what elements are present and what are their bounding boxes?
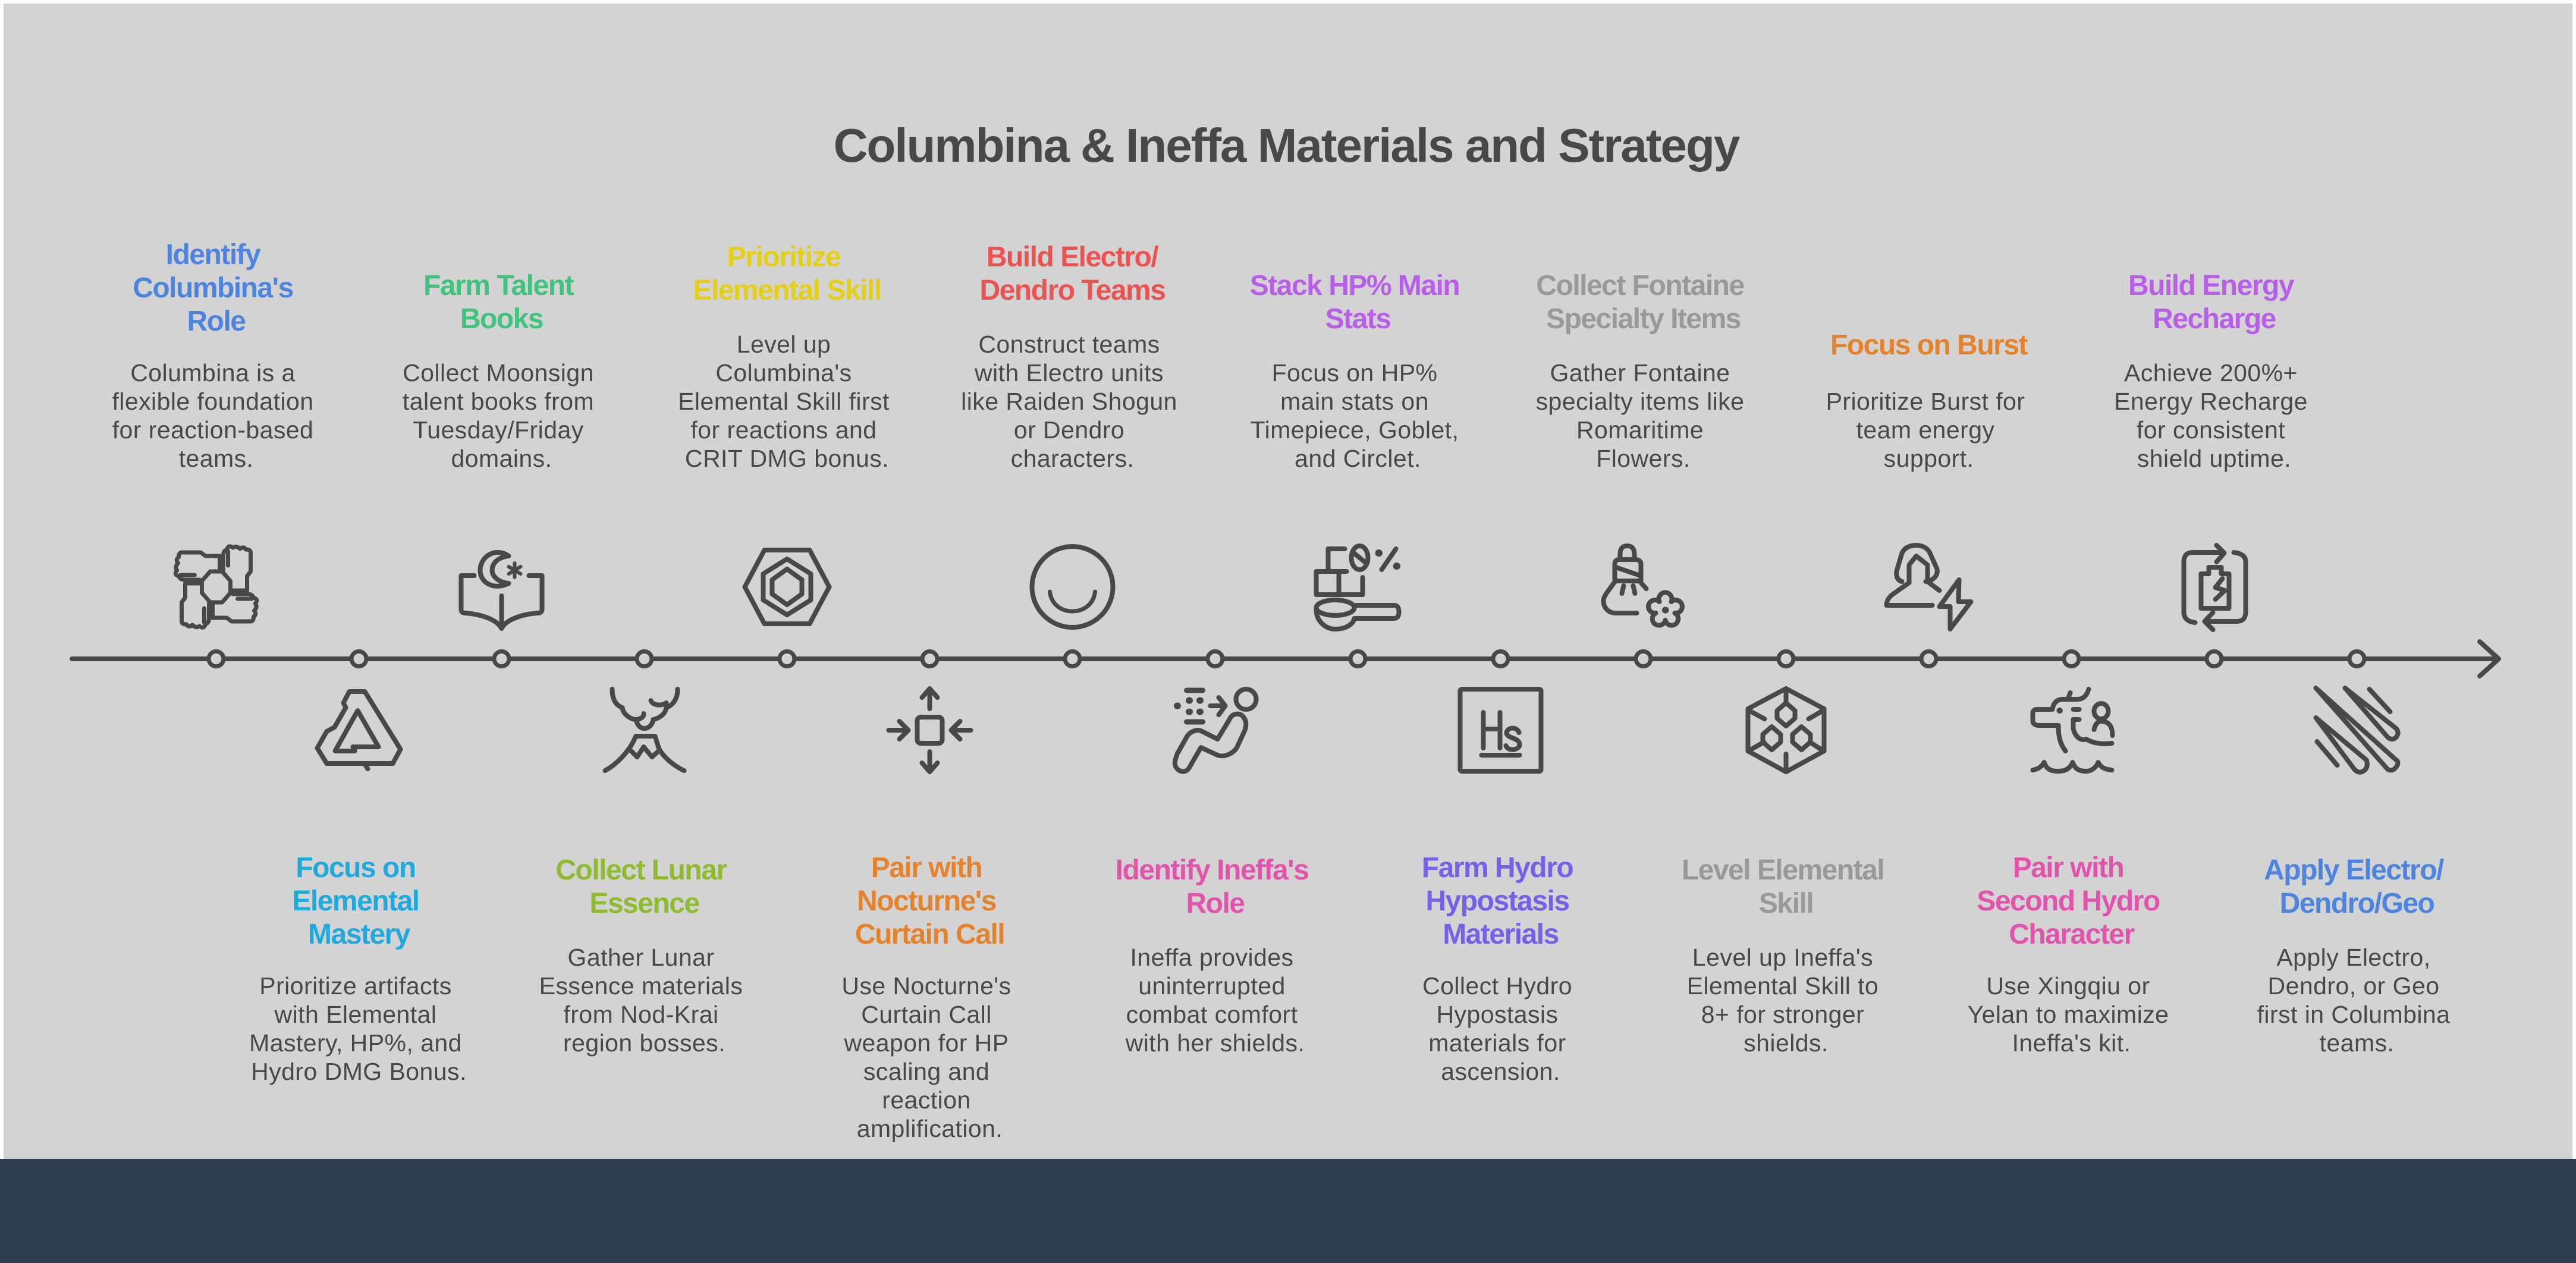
- heading: Nocturne's: [857, 885, 996, 917]
- description: or Dendro: [1014, 416, 1124, 444]
- heading: Character: [2009, 919, 2135, 950]
- heading: Focus on: [296, 852, 416, 884]
- description: shield uptime.: [2137, 445, 2291, 472]
- heading: Second Hydro: [1977, 885, 2160, 917]
- description: Focus on HP%: [1272, 359, 1437, 387]
- heading: Farm Hydro: [1422, 852, 1573, 884]
- heading: Identify: [166, 239, 261, 271]
- step: Farm Talent Books: [403, 270, 594, 629]
- step: Build Energy Recharge: [2114, 270, 2308, 630]
- description: shields.: [1743, 1029, 1829, 1057]
- step: Apply Electro/Dendro/Geo: [2257, 688, 2450, 1057]
- description: weapon for HP: [843, 1029, 1009, 1057]
- description: region bosses.: [563, 1029, 725, 1057]
- step: Collect Fontaine Specialty Items: [1536, 270, 1744, 626]
- icon: battery with cycle arrows: [2184, 545, 2245, 630]
- icon: moon and book: [461, 552, 542, 629]
- heading: Materials: [1443, 919, 1559, 950]
- icon: triangle: [318, 692, 401, 769]
- heading: Skill: [1759, 888, 1813, 919]
- description: talent books from: [403, 388, 594, 415]
- title: Columbina & Ineffa Materials and Strategy: [834, 119, 1741, 172]
- description: characters.: [1011, 445, 1134, 472]
- icon: dragon, person and waves: [2032, 689, 2112, 771]
- heading: Hypostasis: [1425, 885, 1569, 917]
- heading: Pair with: [871, 852, 982, 884]
- description: Elemental Skill to: [1687, 972, 1878, 1000]
- footer band: [0, 1159, 2576, 1263]
- description: Columbina's: [715, 359, 852, 387]
- description: from Nod-Krai: [563, 1001, 719, 1028]
- heading: Pair with: [2013, 852, 2123, 884]
- icon: crystal hexagon: [1748, 689, 1824, 772]
- description: Romaritime: [1576, 416, 1704, 444]
- step: Build Electro/Dendro Teams: [961, 241, 1177, 627]
- description: materials for: [1428, 1029, 1566, 1057]
- heading: Stack HP% Main: [1250, 270, 1459, 301]
- description: domains.: [451, 445, 552, 472]
- description: team energy: [1856, 416, 1994, 444]
- step: Pair with Second Hydro Character: [1968, 689, 2169, 1057]
- description: Hypostasis: [1436, 1001, 1559, 1028]
- description: Essence materials: [539, 972, 743, 1000]
- description: Use Xingqiu or: [1986, 972, 2150, 1000]
- description: 8+ for stronger: [1701, 1001, 1864, 1028]
- heading: Dendro/Geo: [2280, 888, 2434, 919]
- description: for reaction-based: [112, 416, 313, 444]
- heading: Dendro Teams: [980, 275, 1165, 306]
- step: Level Elemental Skill: [1682, 689, 1884, 1057]
- heading: Build Electro/: [987, 241, 1158, 273]
- description: uninterrupted: [1138, 972, 1286, 1000]
- description: Hydro DMG Bonus.: [251, 1058, 467, 1085]
- heading: Essence: [589, 888, 699, 919]
- heading: Farm Talent: [423, 270, 574, 301]
- description: Energy Recharge: [2114, 388, 2308, 415]
- description: Collect Hydro: [1422, 972, 1572, 1000]
- icon: bottle and flower: [1603, 546, 1682, 626]
- description: Columbina is a: [130, 359, 296, 387]
- description: Yelan to maximize: [1968, 1001, 2169, 1028]
- step: Prioritize Elemental Skill: [678, 241, 890, 624]
- heading: Recharge: [2153, 303, 2276, 335]
- icon: square with arrows: [888, 689, 970, 772]
- icon: smiling circle: [1032, 546, 1113, 627]
- step: Collect Lunar Essence: [539, 689, 743, 1057]
- description: for consistent: [2137, 416, 2285, 444]
- description: Construct teams: [978, 331, 1160, 358]
- timeline arrow with nodes: [72, 642, 2499, 676]
- heading: Columbina's: [133, 272, 293, 304]
- description: Level up: [737, 331, 831, 358]
- step: Stack HP% Main Stats: [1250, 270, 1459, 629]
- heading: Prioritize: [727, 241, 841, 273]
- heading: Curtain Call: [855, 919, 1004, 950]
- icon: woman and lightning bolt: [1886, 545, 1971, 629]
- description: Use Nocturne's: [841, 972, 1011, 1000]
- description: first in Columbina: [2257, 1001, 2450, 1028]
- description: Gather Fontaine: [1550, 359, 1730, 387]
- heading: Books: [460, 303, 543, 335]
- description: Prioritize artifacts: [259, 972, 452, 1000]
- description: Gather Lunar: [567, 944, 715, 971]
- icon: falling meteor streaks: [2316, 688, 2398, 772]
- description: Dendro, or Geo: [2268, 972, 2439, 1000]
- description: teams.: [2320, 1029, 2394, 1057]
- heading: Mastery: [308, 919, 411, 950]
- description: CRIT DMG bonus.: [685, 445, 889, 472]
- icon: Hs element tile: [1460, 689, 1541, 771]
- description: and Circlet.: [1295, 445, 1421, 472]
- icon: volcano: [605, 689, 684, 771]
- description: Collect Moonsign: [403, 359, 594, 387]
- icon: measuring scoop and percent: [1317, 546, 1399, 629]
- icon: four hands: [175, 546, 257, 627]
- heading: Identify Ineffa's: [1116, 854, 1308, 886]
- description: flexible foundation: [112, 388, 314, 415]
- description: combat comfort: [1126, 1001, 1298, 1028]
- heading: Apply Electro/: [2264, 854, 2444, 886]
- description: main stats on: [1280, 388, 1429, 415]
- description: Apply Electro,: [2276, 944, 2431, 971]
- description: Elemental Skill first: [678, 388, 890, 415]
- heading: Collect Fontaine: [1536, 270, 1744, 301]
- heading: Elemental Skill: [693, 275, 881, 306]
- description: for reactions and: [690, 416, 877, 444]
- heading: Role: [187, 306, 246, 337]
- description: Level up Ineffa's: [1692, 944, 1873, 971]
- description: with Elemental: [274, 1001, 436, 1028]
- description: ascension.: [1441, 1058, 1560, 1085]
- heading: Build Energy: [2128, 270, 2295, 301]
- step: Focus on Burst: [1826, 329, 2028, 629]
- description: with Electro units: [974, 359, 1164, 387]
- heading: Level Elemental: [1682, 854, 1884, 886]
- description: Ineffa's kit.: [2012, 1029, 2131, 1057]
- description: teams.: [179, 445, 253, 472]
- heading: Stats: [1325, 303, 1390, 335]
- description: Mastery, HP%, and: [249, 1029, 462, 1057]
- description: Timepiece, Goblet,: [1251, 416, 1459, 444]
- step: Pair with Nocturne's Curtain Call: [841, 689, 1011, 1142]
- step: Identify Ineffa's Role: [1116, 689, 1308, 1057]
- icon: arm with particles: [1175, 689, 1256, 772]
- heading: Role: [1186, 888, 1245, 919]
- heading: Specialty Items: [1546, 303, 1741, 335]
- heading: Elemental: [292, 885, 419, 917]
- description: support.: [1884, 445, 1974, 472]
- heading: Focus on Burst: [1830, 329, 2028, 361]
- description: Tuesday/Friday: [413, 416, 584, 444]
- step: Focus on Elemental Mastery: [249, 692, 467, 1085]
- description: like Raiden Shogun: [961, 388, 1177, 415]
- description: amplification.: [857, 1115, 1003, 1142]
- heading: Collect Lunar: [555, 854, 727, 886]
- description: with her shields.: [1125, 1029, 1305, 1057]
- description: Ineffa provides: [1130, 944, 1293, 971]
- description: Prioritize Burst for: [1826, 388, 2025, 415]
- description: Flowers.: [1596, 445, 1691, 472]
- icon: nested hexagons: [744, 550, 829, 624]
- description: specialty items like: [1536, 388, 1744, 415]
- description: reaction: [882, 1086, 971, 1114]
- step: Farm Hydro Hypostasis Materials: [1422, 689, 1573, 1085]
- step: Identify Columbina's Role: [112, 239, 314, 627]
- description: scaling and: [863, 1058, 989, 1085]
- description: Curtain Call: [861, 1001, 992, 1028]
- description: Achieve 200%+: [2124, 359, 2298, 387]
